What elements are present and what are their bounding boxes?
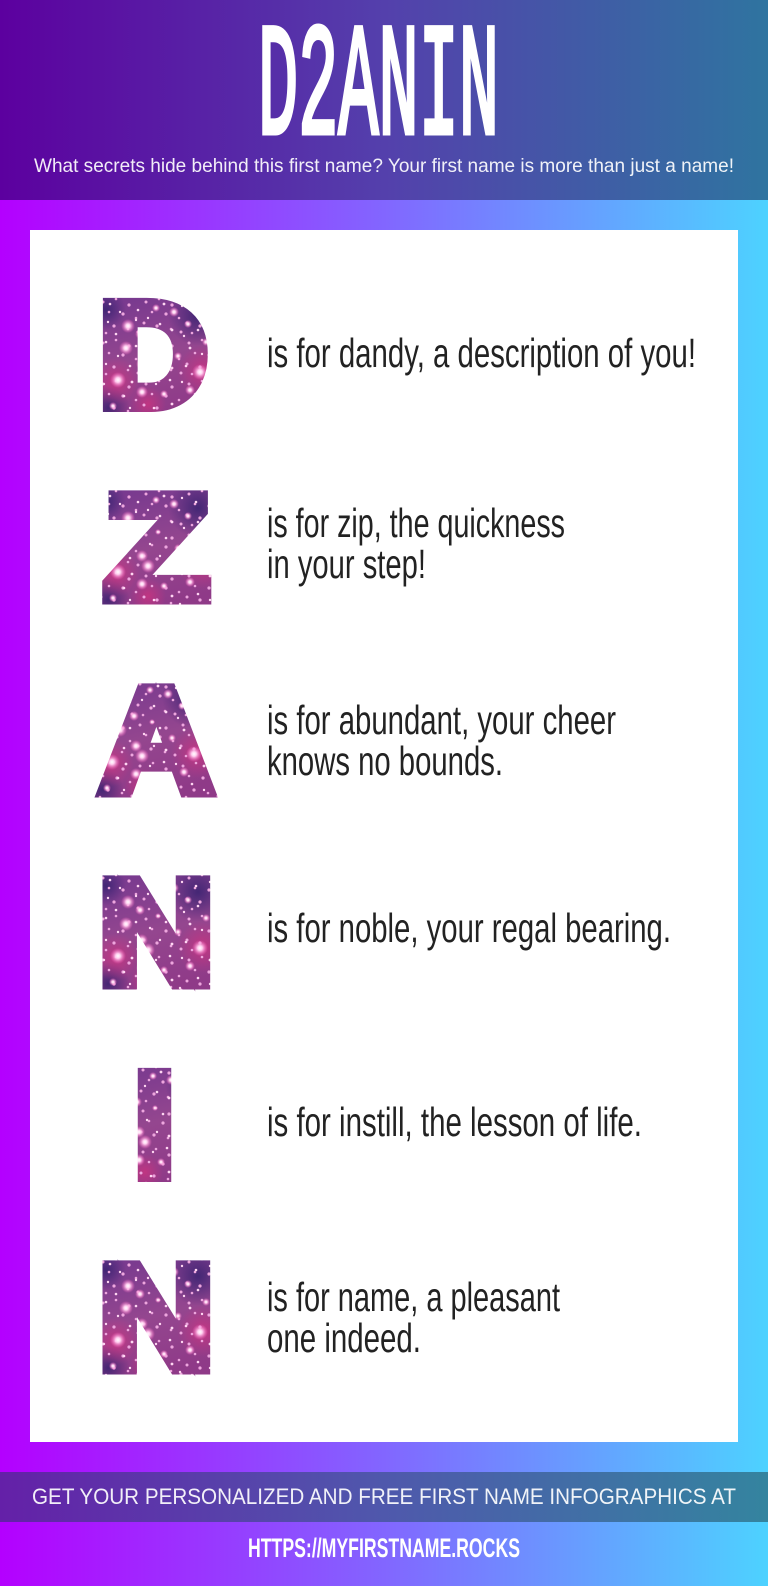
galaxy letter Z: Z: [105, 466, 209, 630]
description for A: [267, 697, 616, 784]
description for N: is for name, a pleasant: [267, 1274, 560, 1320]
galaxy letter A: A: [100, 659, 212, 823]
row: letter I: [134, 1044, 642, 1208]
call-to-action text: GET YOUR PERSONALIZED AND FREE FIRST NAME INFOGRAPHICS AT: [32, 1484, 736, 1509]
row: letter D: [100, 274, 696, 438]
website url: HTTPS://MYFIRSTNAME.ROCKS: [248, 1533, 520, 1563]
white content panel: [30, 230, 738, 1442]
row: letter N second: [99, 1236, 560, 1400]
description for N: [267, 1274, 560, 1361]
row: letter N: [99, 851, 671, 1015]
galaxy letter N: N: [99, 1236, 214, 1400]
subtitle: What secrets hide behind this first name? Your first name is more than just a name!: [34, 155, 734, 177]
description for A: knows no bounds.: [267, 738, 503, 784]
header band: [0, 0, 768, 200]
footer call-to-action band: [0, 1472, 768, 1522]
description for N: one indeed.: [267, 1315, 421, 1361]
description for Z: in your step!: [267, 541, 426, 587]
description for Z: is for zip, the quickness: [267, 500, 565, 546]
row: letter Z: [105, 466, 565, 630]
description for Z: [267, 500, 565, 587]
galaxy letter D: D: [100, 274, 208, 438]
galaxy letter I: I: [134, 1044, 174, 1208]
row: letter A: [100, 659, 616, 823]
galaxy letter N: N: [99, 851, 214, 1015]
description for A: is for abundant, your cheer: [267, 697, 616, 743]
